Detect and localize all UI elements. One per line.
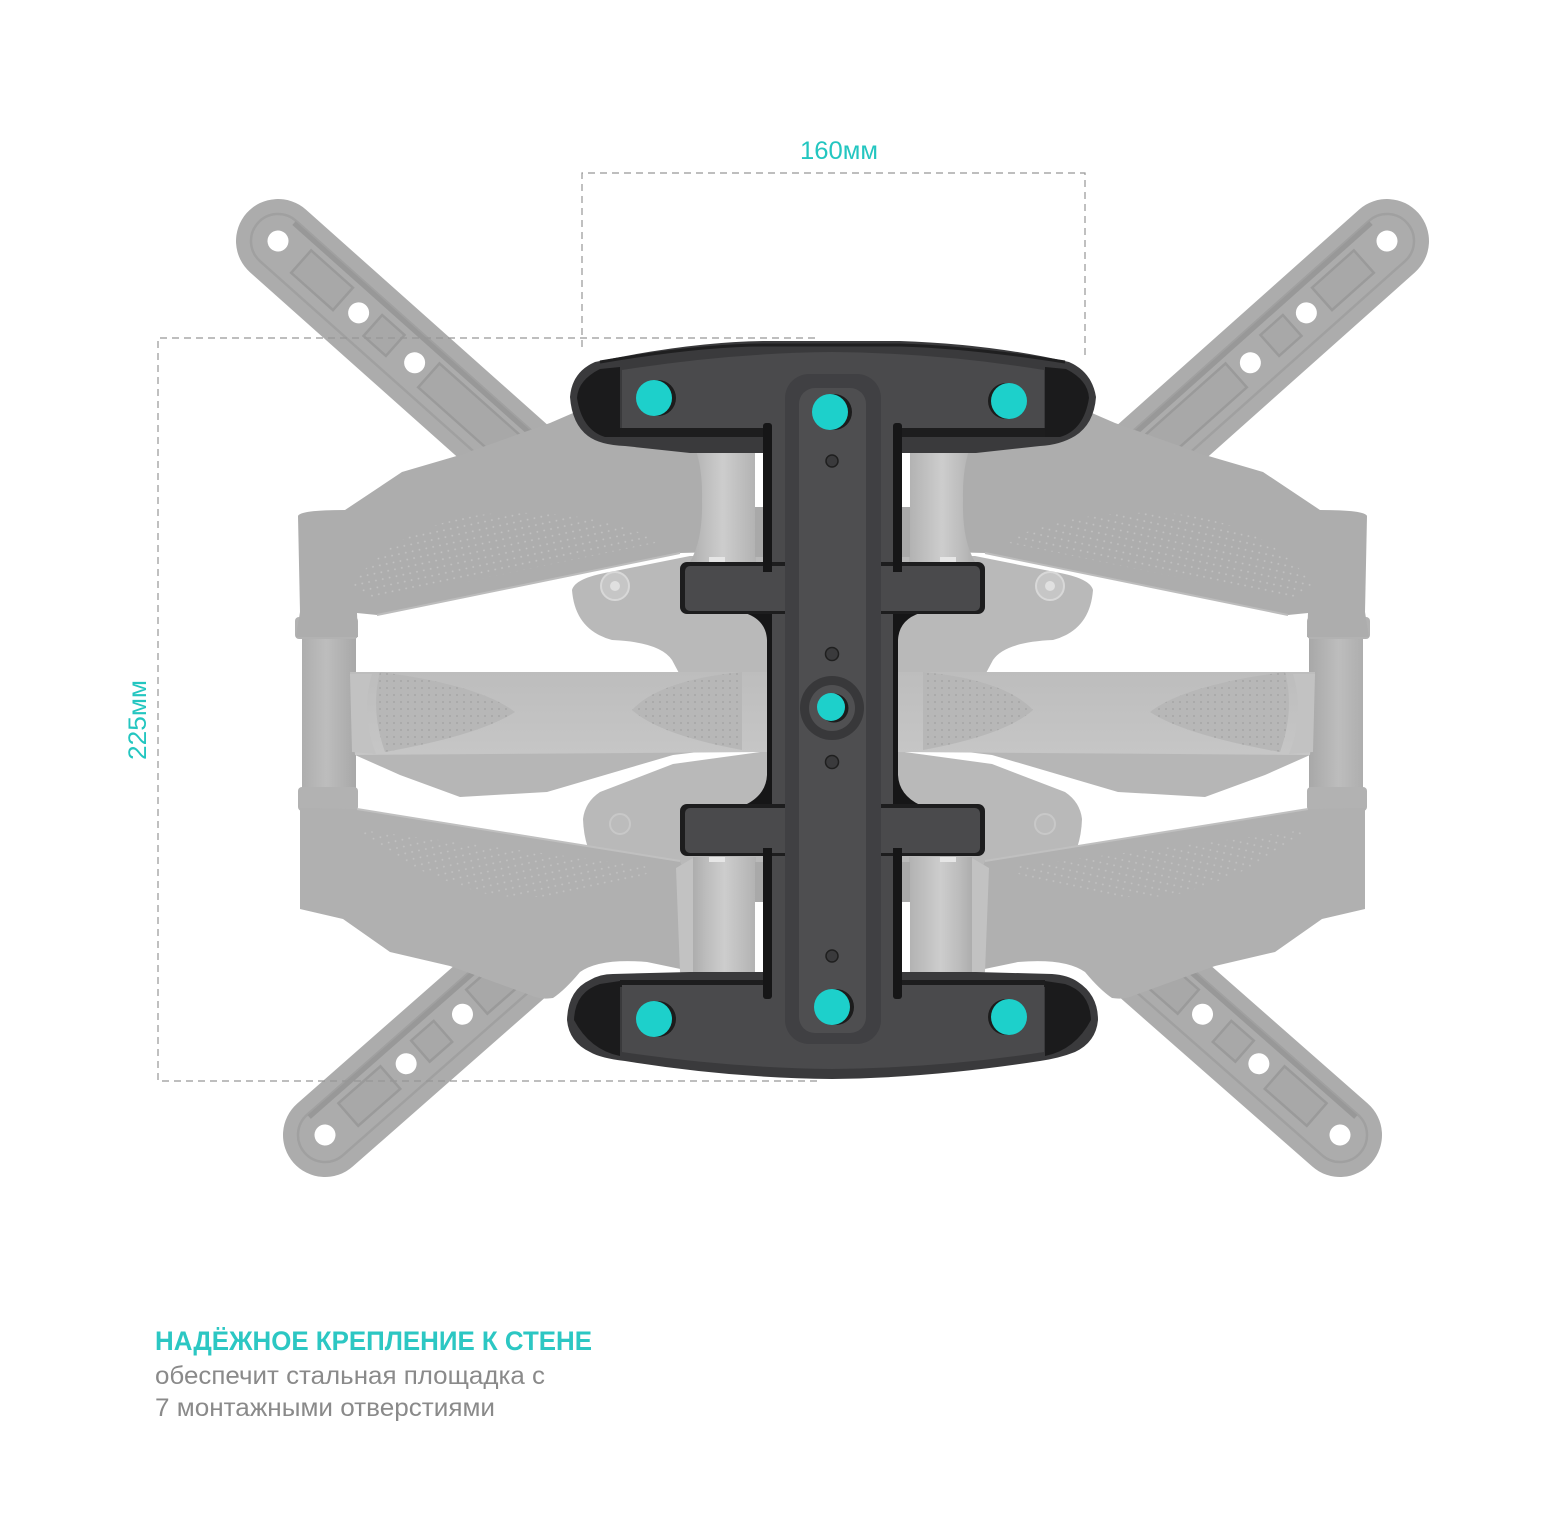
central spine	[785, 374, 881, 1044]
screws	[826, 455, 838, 962]
centre boss	[800, 676, 864, 740]
description text	[155, 1362, 545, 1422]
top plate	[570, 341, 1096, 453]
lower crossbar	[680, 804, 985, 860]
wall plate	[567, 341, 1098, 1079]
articulating arms: right side	[890, 410, 1370, 999]
arm: bottom-right VESA strip	[1073, 896, 1378, 1173]
label: 160 mm: 160мм	[800, 137, 878, 165]
arm: top-right VESA strip	[1121, 203, 1425, 482]
description text: 7 монтажными отверстиями	[155, 1394, 495, 1422]
label: 225 mm: 225мм	[124, 680, 152, 760]
dimension bracket: 225 mm	[158, 338, 822, 1081]
bottom plate	[567, 972, 1098, 1079]
arm: bottom-left VESA strip	[287, 896, 592, 1173]
upper crossbar	[680, 560, 985, 614]
description text: обеспечит стальная площадка с	[155, 1362, 545, 1390]
dimension bracket: 160 mm	[582, 173, 1085, 358]
slots beside spine	[745, 423, 920, 999]
arm: top-left VESA strip	[240, 203, 544, 482]
heading: НАДЁЖНОЕ КРЕПЛЕНИЕ К СТЕНЕ	[155, 1326, 592, 1356]
articulating arms: left side	[295, 410, 775, 999]
central spine back	[772, 424, 893, 994]
mounting holes	[636, 380, 1027, 1037]
